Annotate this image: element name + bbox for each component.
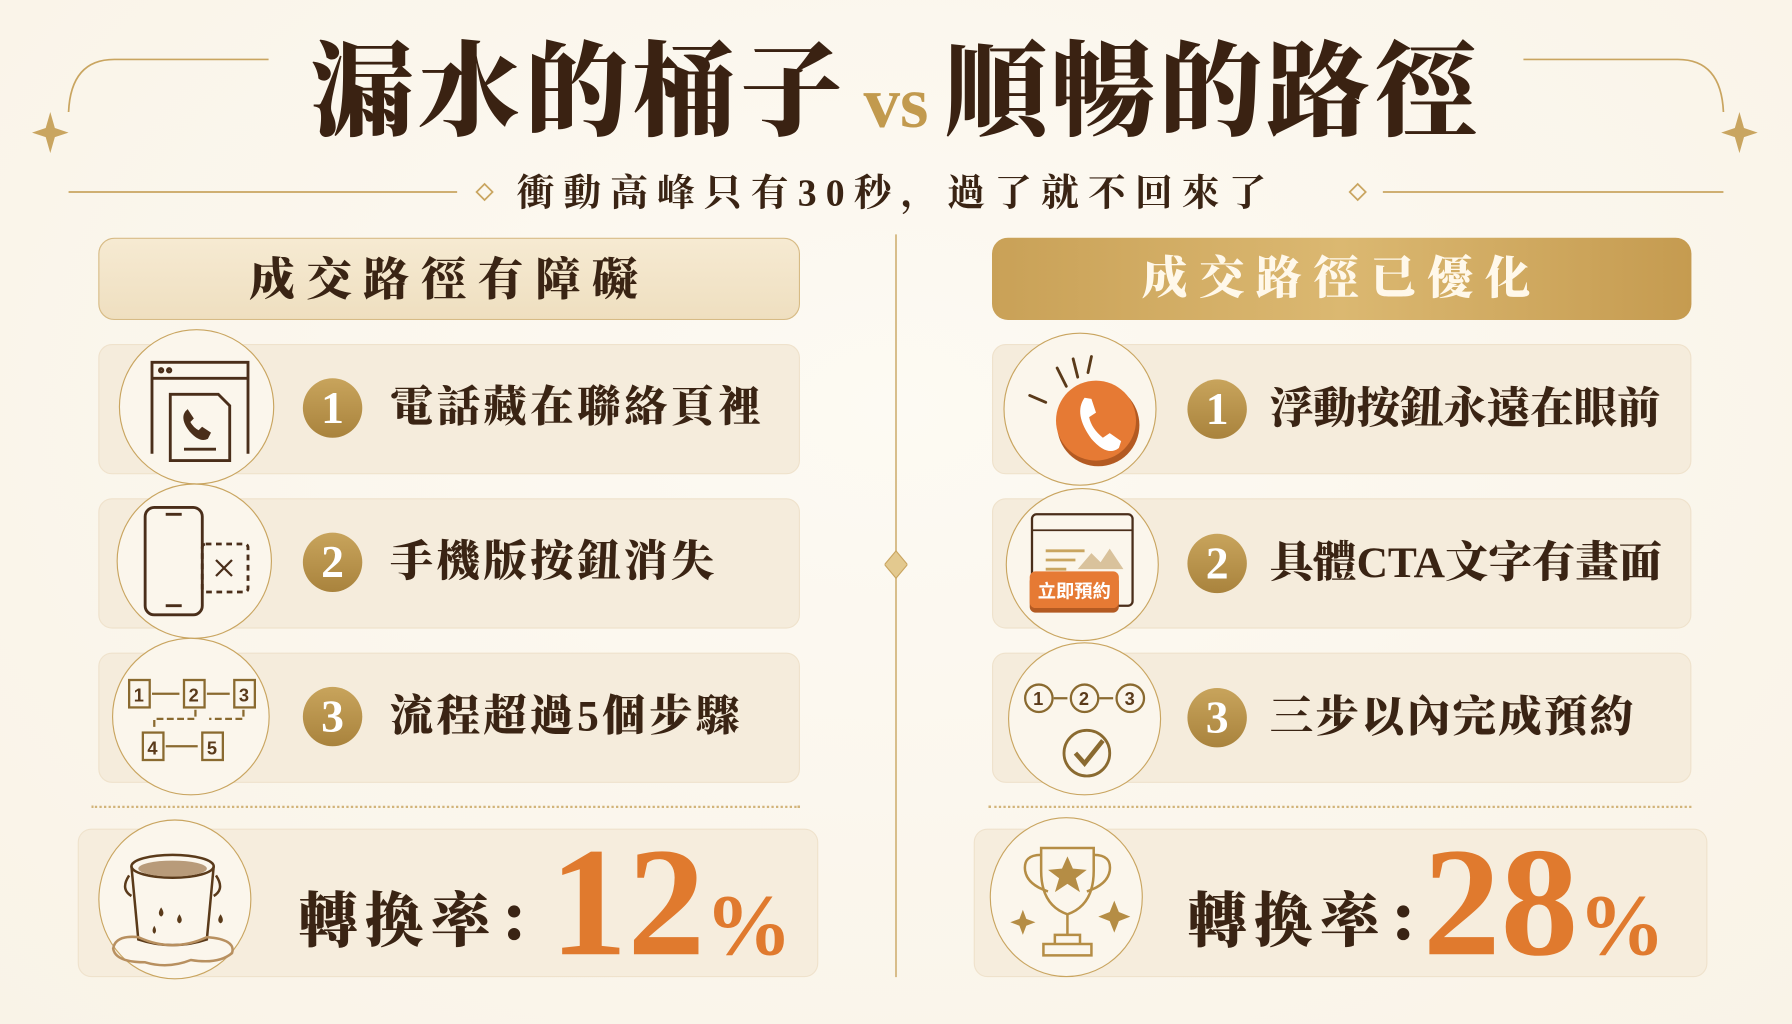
heading left: 成交路徑有障礙 [249,254,649,305]
icon: three steps check: 1 [1033,688,1043,709]
result card left: 12% [550,817,792,989]
heading right: 成交路徑已優化 [1142,253,1542,304]
heading right [992,238,1691,320]
icon: five steps: 2 [189,685,199,706]
card 1: 浮動按鈕永遠在眼前 [1270,385,1661,433]
icon: five steps [112,638,270,795]
card 3: 流程超過5個步驟 [390,693,743,741]
result card right [974,829,1707,977]
result card left: 轉換率： [298,890,563,955]
icon: trophy [990,817,1143,977]
icon: five steps: 3 [239,685,249,706]
panel: left obstacles [78,238,818,989]
card 1 [98,344,800,474]
icon: five steps: 1 [134,685,144,706]
card 2: 2 [1206,537,1229,589]
icon: hidden phone page [119,329,274,485]
icon: phone missing button [117,483,272,639]
icon: three steps check [1008,642,1161,795]
card 1: 1 [321,382,344,433]
card 2: 具體CTA文字有畫面 [1270,539,1662,587]
title: 漏水的桶子vs順暢的路徑 [310,37,1482,150]
card 3: 3 [1206,691,1229,743]
icon: floating call button [1003,333,1157,486]
card 3 [992,653,1691,783]
card 2: 2 [321,536,344,587]
dotted divider [91,806,800,808]
card 3: 三步以內完成預約 [1270,694,1635,742]
card 3: 3 [321,690,344,742]
result card right: 轉換率： [1187,890,1453,955]
card 2 [992,498,1691,629]
icon: five steps: 4 [147,737,158,758]
card 3 [98,653,800,783]
result card right: 28% [1423,817,1665,989]
heading left [98,238,800,320]
icon: CTA page: 立即預約 [1038,578,1111,604]
panel: right optimized [974,238,1708,989]
card 1: 1 [1206,383,1229,434]
card 1 [992,344,1691,474]
icon: CTA page [1006,488,1159,641]
icon: three steps check: 2 [1079,688,1089,709]
subtitle: 衝動高峰只有30秒，過了就不回來了 [517,174,1275,215]
card 1: 電話藏在聯絡頁裡 [390,384,765,432]
card 2 [98,498,800,629]
center divider [884,234,908,978]
corner ornaments [32,58,1758,202]
dotted divider [989,806,1691,808]
icon: three steps check: 3 [1125,688,1135,709]
card 2: 手機版按鈕消失 [390,538,718,586]
icon: leaking bucket [98,819,251,979]
icon: five steps: 5 [207,737,217,758]
result card left [78,829,818,977]
